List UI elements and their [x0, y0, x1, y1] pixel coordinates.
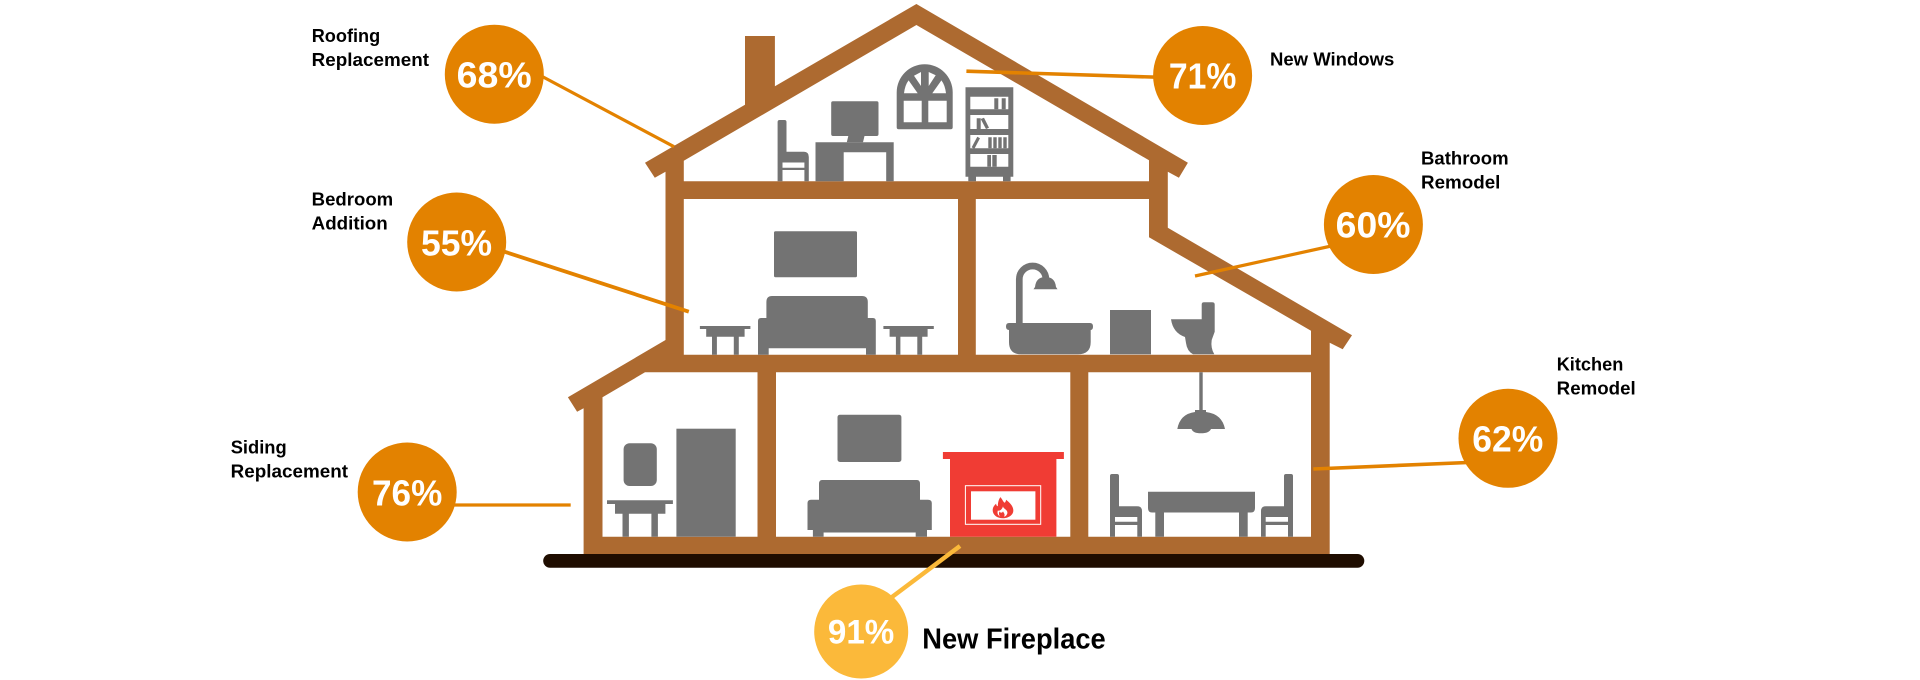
label line two: Remodel: [1557, 377, 1636, 398]
value: 60%: [1336, 205, 1410, 246]
toilet: [1171, 302, 1215, 354]
arched window: [897, 64, 953, 129]
value: 91%: [828, 613, 894, 651]
label: Siding: [231, 436, 287, 457]
wall picture: [838, 415, 901, 462]
value: 62%: [1472, 419, 1543, 460]
callout: bedroom addition: [312, 189, 506, 292]
callout: bathroom remodel: [1324, 147, 1509, 274]
callout: roofing replacement: [312, 25, 544, 124]
badge: [445, 25, 544, 124]
left side table: [700, 326, 750, 355]
shelf openings: [970, 97, 1008, 167]
office chair: [778, 120, 809, 181]
left dining chair: [1110, 474, 1142, 537]
shower head: [1034, 277, 1058, 289]
living room sofa: [808, 480, 932, 537]
shower faucet: [1019, 266, 1046, 325]
wall picture: [774, 231, 857, 277]
wall mirror: [624, 443, 657, 486]
bedroom furniture: [700, 231, 934, 355]
label: Bathroom: [1421, 147, 1509, 168]
line: bedroom: [490, 247, 689, 312]
console table: [607, 500, 673, 537]
desk: [816, 142, 894, 181]
value: 71%: [1169, 56, 1236, 97]
bathroom cabinet: [1110, 310, 1151, 354]
callout: new windows: [1153, 26, 1394, 125]
bathtub: [1006, 323, 1093, 354]
badge: [1324, 175, 1423, 274]
label: New Fireplace: [922, 623, 1106, 655]
badge: [358, 442, 457, 542]
label line two: Replacement: [231, 460, 348, 481]
label: New Windows: [1270, 49, 1394, 70]
computer monitor: [831, 101, 878, 142]
dining table: [1148, 492, 1255, 537]
left room furniture: [607, 429, 736, 537]
flame icon: [993, 497, 1013, 518]
bookshelf: [966, 87, 1013, 181]
house structure: [568, 4, 1352, 554]
badge: [407, 192, 506, 292]
line: kitchen: [1313, 462, 1480, 469]
badge: [814, 584, 908, 678]
attic office furniture: [778, 64, 1013, 181]
ground shadow: [543, 554, 1364, 568]
badge: [1153, 26, 1252, 125]
line: siding: [440, 503, 571, 507]
callout: new fireplace: [814, 584, 1106, 678]
value: 76%: [372, 472, 442, 513]
leader lines: [440, 70, 1480, 505]
value: 55%: [421, 222, 492, 263]
bookshelf frame: [966, 87, 1013, 181]
label: Bedroom: [312, 189, 393, 210]
firebox frame: [965, 486, 1041, 524]
label line two: Replacement: [312, 49, 429, 70]
label: Roofing: [312, 25, 380, 46]
mantel and body: [943, 452, 1064, 537]
badge: [1458, 389, 1558, 488]
line: new fireplace: [880, 546, 960, 606]
fireplace: [943, 452, 1064, 537]
label line two: Addition: [312, 212, 388, 233]
firebox opening: [971, 491, 1035, 520]
line: new windows: [966, 71, 1170, 78]
right dining chair: [1261, 474, 1293, 537]
living room furniture: [808, 415, 932, 537]
pendant lamp: [1177, 372, 1225, 433]
bedroom sofa: [758, 296, 876, 355]
books: [972, 98, 1007, 167]
line: bathroom: [1195, 243, 1345, 276]
callout: siding replacement: [231, 436, 457, 542]
door: [676, 429, 736, 537]
value: 68%: [457, 54, 532, 95]
callout: kitchen remodel: [1458, 354, 1636, 488]
bathroom fixtures: [1006, 266, 1215, 354]
right side table: [883, 326, 934, 355]
label line two: Remodel: [1421, 171, 1500, 192]
label: Kitchen: [1557, 354, 1623, 375]
kitchen and dining furniture: [1110, 372, 1293, 537]
line: roofing: [530, 70, 674, 147]
